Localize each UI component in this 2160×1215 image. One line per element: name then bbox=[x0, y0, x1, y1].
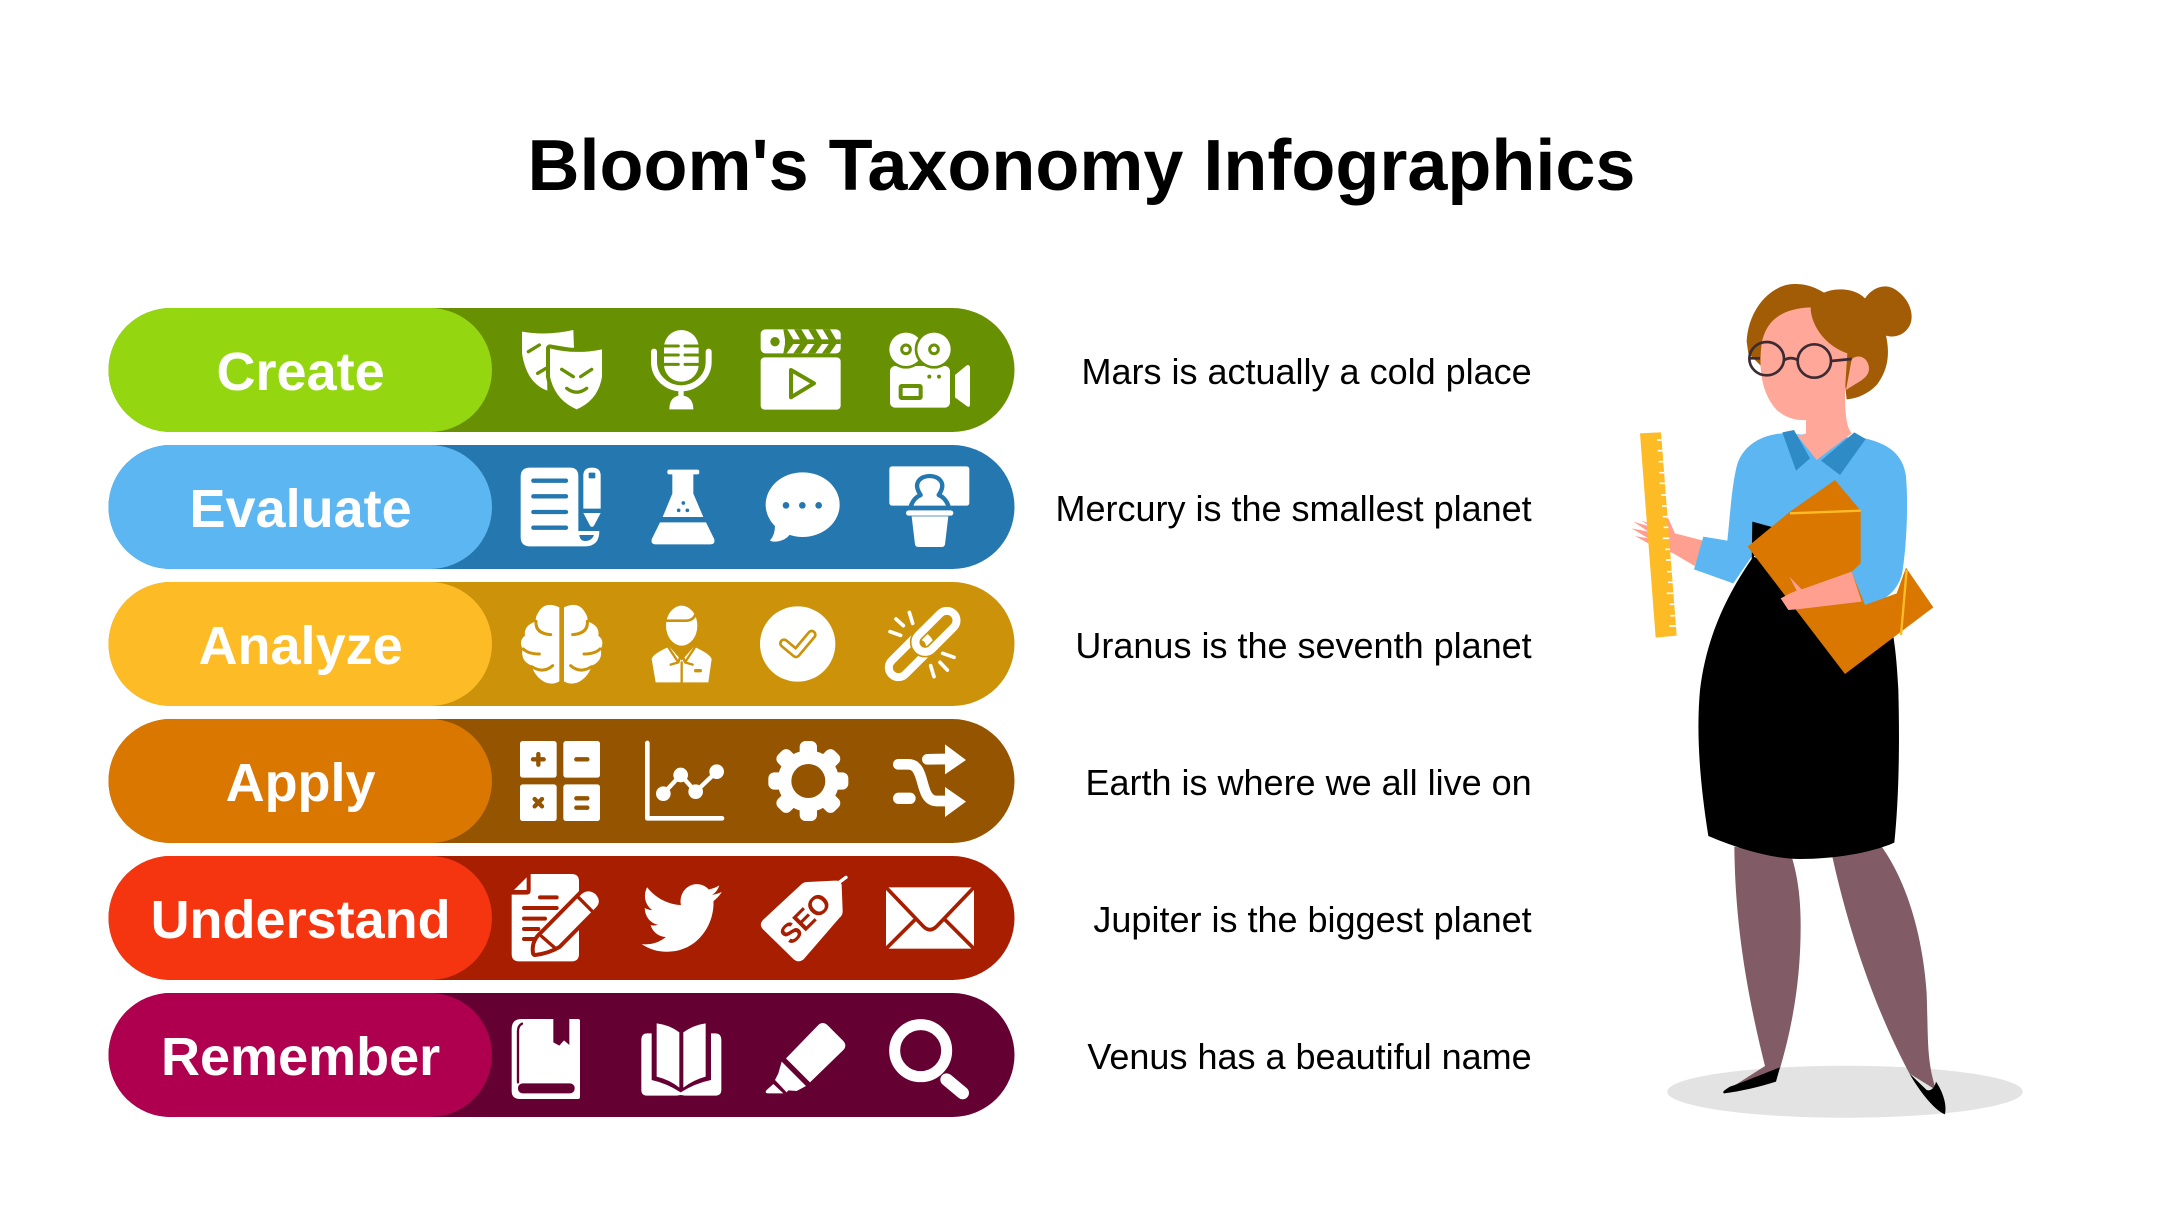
legs, shoes and skirt bbox=[1698, 557, 1946, 1114]
pill: Evaluate bbox=[108, 445, 1014, 569]
label: Remember: Remember bbox=[161, 1027, 440, 1087]
hair bbox=[1747, 284, 1912, 399]
icons: Analyze bbox=[521, 605, 961, 684]
folder elastic bands bbox=[1790, 511, 1907, 635]
icon: closed book bbox=[512, 1019, 580, 1099]
label: Evaluate: Evaluate bbox=[190, 479, 412, 539]
icon: person in suit bbox=[652, 606, 712, 682]
illustration: teacher bbox=[1632, 284, 2023, 1118]
icon: magnifying glass bbox=[895, 1025, 963, 1093]
shirt bbox=[1694, 433, 1907, 605]
pill: Create bbox=[108, 308, 1014, 432]
pill: Apply bbox=[108, 719, 1014, 843]
row: Apply bbox=[108, 719, 1014, 843]
icon: clapperboard bbox=[761, 329, 841, 410]
upper body bbox=[1632, 284, 1933, 674]
icon: SEO tag: SEO bbox=[773, 886, 837, 950]
description: Remember: Venus has a beautiful name bbox=[1087, 1036, 1532, 1077]
icon: line chart bbox=[647, 743, 724, 818]
folder bbox=[1748, 480, 1933, 674]
pill: Remember bbox=[108, 993, 1014, 1117]
label: Understand: Understand bbox=[151, 890, 451, 950]
label: Apply: Apply bbox=[226, 753, 376, 813]
icon: film camera bbox=[889, 333, 970, 408]
row: Analyze bbox=[108, 582, 1014, 706]
neckline bbox=[1797, 433, 1852, 460]
icon: twitter bird bbox=[642, 884, 722, 952]
icon: shuffle arrows bbox=[898, 744, 966, 817]
row: Create bbox=[108, 308, 1014, 432]
row: Understand bbox=[108, 856, 1014, 980]
icon: calculator keys bbox=[520, 741, 600, 821]
icon: document and pencil bbox=[512, 874, 599, 961]
icons: Evaluate bbox=[521, 466, 969, 547]
row: Evaluate bbox=[108, 445, 1014, 569]
face and neck bbox=[1760, 307, 1852, 460]
description: Apply: Earth is where we all live on bbox=[1085, 762, 1532, 803]
dress top bbox=[1752, 522, 1773, 560]
description: Understand: Jupiter is the biggest planet bbox=[1093, 899, 1532, 940]
icon: envelope bbox=[886, 887, 974, 949]
icon: theatre masks bbox=[522, 330, 602, 409]
pill: Understand bbox=[108, 856, 1014, 980]
icon: speech bubble bbox=[766, 472, 840, 542]
ear bbox=[1846, 357, 1869, 390]
icon: highlighter marker bbox=[766, 1023, 845, 1093]
ground shadow bbox=[1667, 1066, 2023, 1118]
ruler bbox=[1640, 432, 1677, 638]
icon: check badge bbox=[760, 606, 835, 682]
row: Remember bbox=[108, 993, 1014, 1117]
icon: microphone bbox=[654, 330, 709, 409]
collar bbox=[1782, 430, 1866, 475]
icons: Understand bbox=[512, 874, 974, 961]
description: Analyze: Uranus is the seventh planet bbox=[1075, 625, 1532, 666]
description: Evaluate: Mercury is the smallest planet bbox=[1056, 488, 1532, 529]
icon: SEO tag bbox=[761, 877, 846, 961]
icon: speaker at podium bbox=[889, 466, 969, 547]
description: Create: Mars is actually a cold place bbox=[1081, 351, 1532, 392]
icons: Apply bbox=[520, 741, 966, 821]
icons: Remember bbox=[512, 1019, 963, 1099]
icon: open book bbox=[641, 1023, 721, 1096]
title: Bloom's Taxonomy Infographics bbox=[528, 126, 1635, 206]
raised hand and fingers bbox=[1632, 518, 1703, 566]
glasses bbox=[1749, 342, 1852, 378]
label: Analyze: Analyze bbox=[199, 616, 403, 676]
forearm and hand bbox=[1781, 572, 1862, 610]
label: Create: Create bbox=[217, 342, 385, 402]
icons: Create bbox=[522, 329, 970, 410]
pill: Analyze bbox=[108, 582, 1014, 706]
icon: brain bbox=[521, 605, 602, 684]
icon: flask bbox=[651, 470, 714, 544]
icon: gear bbox=[768, 741, 848, 821]
icon: broken chain link bbox=[885, 607, 961, 681]
icon: notes and pencil bbox=[521, 468, 601, 546]
